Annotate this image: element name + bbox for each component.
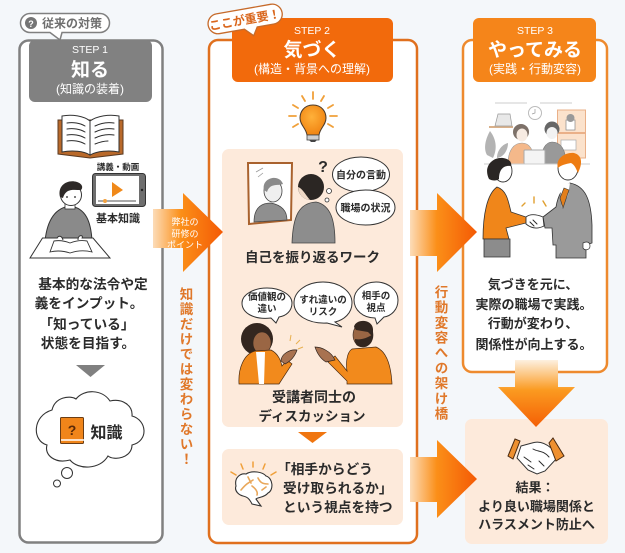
text: result: ハラスメント防止へ [478,517,595,532]
speech bubble: workplace situation: 職場の状況 [340,202,390,214]
thought cloud: knowledge: 知識 [90,423,123,442]
text: perspective statement [277,461,393,515]
speech bubble: miscommunication risk: すれ違いの [299,294,347,306]
illustration: person from behind: ? [318,159,328,176]
illustration: man talking [315,321,392,384]
panel: step 1 [20,14,162,542]
heading: discussion between participants [258,389,366,424]
illustration: person from behind [292,159,335,243]
text: step 3 description: 実際の職場で実践。 [475,297,593,312]
text: step 3 description: 気づきを元に、 [488,277,578,292]
text: step 1 description: 「知っている」 [39,317,135,332]
thought cloud: knowledge [36,392,144,487]
text: step 3 description: 関係性が向上する。 [475,337,593,352]
heading: self-reflection work: 自己を振り返るワーク [245,249,380,265]
badge: conventional measures: ? [28,19,34,29]
speech bubble: other's perspective [354,282,398,324]
arrow: step 1 to step 2: ポイント [167,240,203,250]
text: step 1 description: 状態を目指す。 [41,335,135,351]
speech bubble: miscommunication risk [294,282,352,327]
panel: step 3 [463,18,607,372]
illustration: woman talking [239,323,303,384]
icon: brain [231,462,276,506]
icon: handshake [508,438,564,474]
speech bubble: other's perspective: 視点 [366,302,386,314]
arrow: step 1 to step 2: 弊社の [171,216,199,227]
text: step 1 description: 義をインプット。 [35,295,143,311]
panel: perspective [222,449,403,525]
badge: conventional measures [21,14,110,40]
text: step 3 description: 行動が変わり、 [488,316,578,331]
step 2 header: 気づく [283,39,341,61]
icon: open book [58,115,123,158]
speech bubble: different values: 価値観の [248,291,286,303]
heading: discussion between participants: 受講者同士の [272,389,356,405]
down triangle [298,432,327,443]
step 1 header: (知識の装着) [56,81,124,96]
icon: video tablet [92,174,146,206]
arrow: step 1 to step 2 [153,193,223,272]
step 3 header: (実践・行動変容) [489,61,581,76]
illustration: mirror reflection [248,163,292,224]
speech bubble: other's perspective: 相手の [362,290,390,302]
illustration: office background [484,103,590,164]
down triangle [76,365,105,377]
label: basic knowledge: 基本知識 [96,211,140,225]
text: step 3 description [475,277,593,352]
label: lectures and videos: 講義・動画 [97,162,140,172]
heading: discussion between participants: ディスカッション [258,408,366,424]
vertical text: bridge to behavior change: 行動変容への架け橋 [432,285,448,422]
vertical text: knowledge alone changes nothing: 知識だけでは変わらない！ [178,287,193,467]
badge: this is important [206,3,285,43]
icon: light bulb [289,92,337,142]
step 3 header: やってみる [488,39,582,61]
step 3 header [473,18,596,82]
step 1 header: 知る [71,59,109,81]
speech bubble: own behavior: 自分の言動 [336,168,386,182]
illustration: person studying [30,181,110,258]
illustration: man shaking hands [522,153,592,258]
speech bubble: workplace situation [336,190,395,225]
step 2 header [232,18,393,82]
text: perspective statement: 受け取られるか」 [283,480,393,496]
panel: step 2 [206,3,417,543]
arrow: step 3 to result [498,360,575,427]
speech bubble: own behavior [332,157,390,192]
icon: question book: ? [68,422,76,438]
step 2 header: STEP 2 [294,25,330,37]
step 1 header [29,40,152,102]
speech bubble: miscommunication risk: リスク [309,307,337,318]
text: perspective statement: という視点を持つ [283,499,393,515]
step 2 header: (構造・背景への理解) [254,62,370,76]
speech bubble: different values [242,288,292,323]
step 1 header: STEP 1 [72,44,108,56]
panel: self-reflection and discussion [222,149,403,427]
arrow: perspective to result [410,440,477,518]
step 3 header: STEP 3 [517,25,553,37]
illustration: woman shaking hands [483,158,526,257]
speech bubble: different values: 違い [257,303,277,315]
text: result [478,480,595,532]
text: step 1 description: 基本的な法令や定 [38,276,148,292]
text: result: より良い職場関係と [478,499,595,514]
badge: this is important: ここが重要！ [208,6,282,33]
arrow: step 1 to step 2: 研修の [171,228,199,239]
badge: conventional measures: 従来の対策 [42,16,102,30]
text: result: 結果： [515,480,555,495]
text: perspective statement: 「相手からどう [277,461,373,477]
arrow: step 2 to step 3 [410,193,477,272]
text: step 1 description [35,276,148,351]
panel: result [465,419,608,544]
